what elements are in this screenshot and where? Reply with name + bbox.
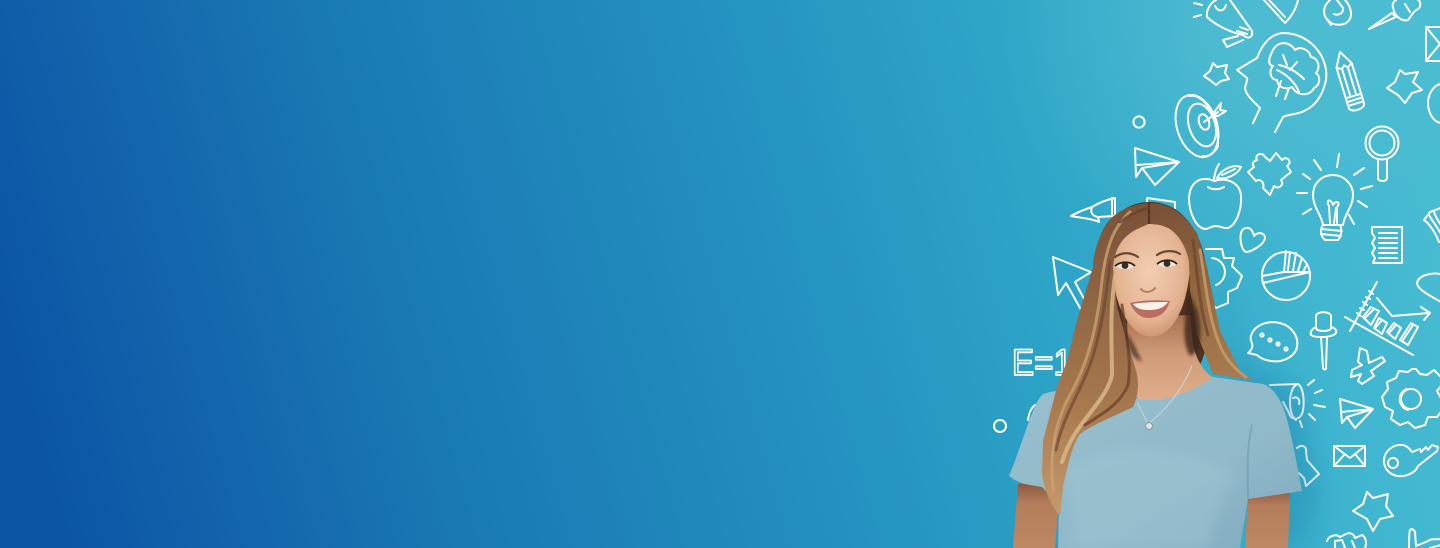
nose: [1141, 288, 1155, 292]
icon: heart: [1241, 228, 1265, 252]
icon: light bulb: [1297, 154, 1372, 240]
left arm: [1013, 484, 1058, 548]
eyebrows: [1115, 251, 1180, 257]
jaw shadow on neck: [1126, 332, 1142, 362]
icon: gear behind hair: [1206, 249, 1242, 308]
icon: apple: [1189, 164, 1241, 229]
icon: rectangle behind hair: [1147, 198, 1175, 208]
sleeve seams: [1058, 425, 1252, 505]
icon: fragment beside shoulder: [1028, 405, 1035, 420]
icon: big arrow: [1053, 257, 1098, 325]
icon: circle right edge: [1428, 84, 1440, 123]
neck and chest: [1127, 315, 1214, 400]
icon: key: [1384, 445, 1438, 476]
icon: swirl top: [1324, 0, 1351, 25]
person: [1009, 202, 1320, 548]
hair back: [1097, 202, 1210, 370]
eyes: [1115, 260, 1177, 269]
hair strands: [1052, 208, 1246, 490]
icon cluster: [994, 0, 1440, 548]
icon: head with brain: [1237, 33, 1326, 132]
icon: bottom puzzle: [1327, 533, 1366, 548]
necklace: [1137, 366, 1192, 429]
face: [1113, 224, 1190, 336]
icon: magnifier: [1366, 126, 1398, 181]
icon: bottom corner shape: [1409, 529, 1440, 548]
icon: shield top: [1264, 0, 1298, 23]
smile: [1130, 300, 1170, 318]
icon: push pin top: [1369, 0, 1420, 29]
icon: star right: [1387, 70, 1422, 103]
icon: large star: [1353, 492, 1393, 531]
icon: pencil: [1332, 50, 1365, 112]
right arm: [1245, 488, 1290, 548]
icon: envelope top right: [1426, 27, 1440, 61]
icon: envelope: [1334, 446, 1365, 466]
icon: book edge: [1424, 208, 1440, 242]
icon: pie chart: [1262, 251, 1310, 300]
icon: small star: [1204, 63, 1229, 85]
icon: formula: E=1: [1012, 342, 1072, 383]
icon: flag pointer: [1071, 198, 1115, 222]
icon: push pin: [1311, 312, 1336, 370]
hair left lock: [1042, 203, 1148, 516]
shirt fold shading: [1062, 450, 1236, 548]
icon: paper plane: [1135, 148, 1179, 185]
icon: small circle left: [994, 420, 1006, 432]
soft shadow on the right of person: [1215, 260, 1320, 548]
icon: speech bubble: [1248, 322, 1297, 361]
icon: notepad: [1372, 227, 1402, 263]
icon: target with arrow: [1168, 89, 1226, 163]
hair right lock: [1150, 203, 1253, 380]
icon: puzzle piece: [1248, 153, 1291, 195]
icon: small circle: [1133, 116, 1145, 128]
t-shirt: [1009, 377, 1302, 548]
icon: large gear: [1382, 369, 1440, 428]
icon: declining bar chart: [1345, 282, 1430, 355]
icon: paper plane lower: [1340, 399, 1373, 428]
icon: megaphone lower: [1270, 380, 1325, 427]
icon: megaphone top: [1194, 0, 1252, 47]
dark hair beside neck: [1184, 290, 1200, 356]
icon: puzzle behind sleeve: [1296, 446, 1319, 486]
icon: yen symbol: [1351, 348, 1385, 384]
icon: heart edge: [1417, 273, 1440, 302]
